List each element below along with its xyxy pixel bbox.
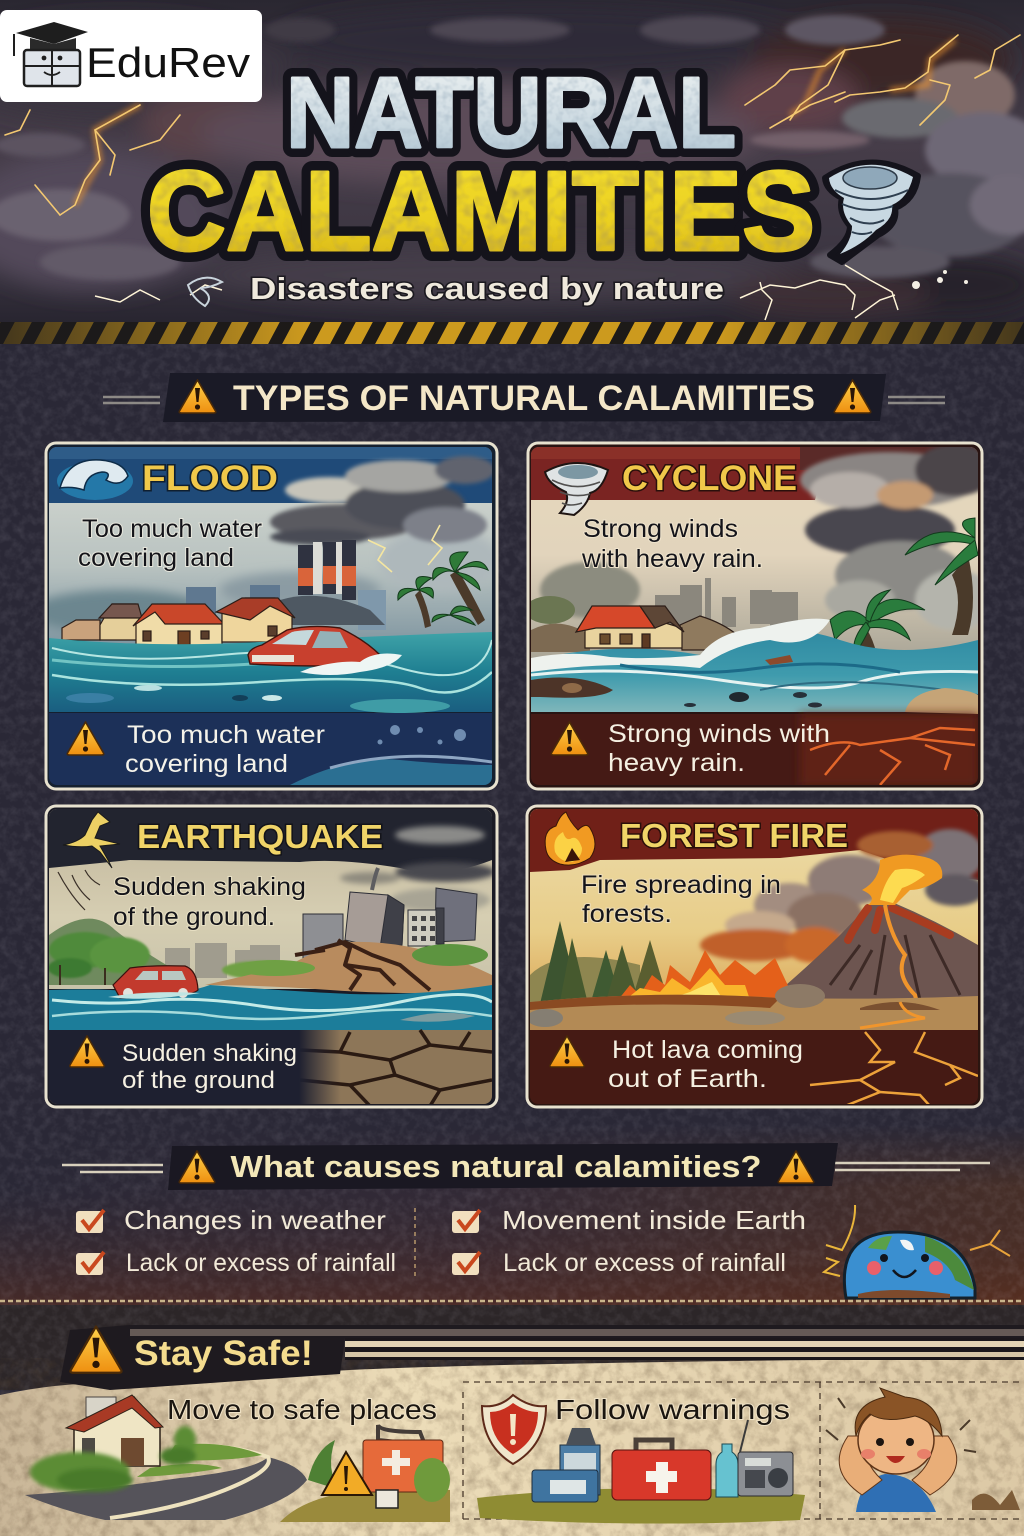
volcano smoke bbox=[700, 829, 985, 963]
check item: Changes in weather bbox=[124, 1205, 386, 1235]
left trees and rocks bbox=[525, 596, 590, 652]
cyclone title: CYCLONE bbox=[622, 459, 797, 498]
icon: flame bbox=[545, 812, 595, 865]
red car bbox=[248, 626, 402, 675]
flood sky caption bbox=[78, 515, 262, 572]
floodwater bbox=[49, 632, 492, 713]
fire sky caption: forests. bbox=[582, 900, 672, 928]
earthquake sky and header bbox=[49, 809, 495, 989]
subtitle: Disasters caused by nature bbox=[250, 271, 724, 306]
cyclone sky caption: Strong winds bbox=[583, 515, 738, 543]
forest fire sky and header bbox=[530, 809, 978, 1014]
palm trees bbox=[398, 552, 488, 628]
fire caption text: out of Earth. bbox=[608, 1065, 767, 1093]
distant buildings bbox=[186, 585, 386, 630]
cyclone storm clouds bbox=[540, 444, 995, 630]
flood title: FLOOD bbox=[142, 459, 278, 498]
panel: flood bbox=[30, 443, 500, 789]
water surge bbox=[531, 619, 978, 714]
safety item: follow warnings: Follow warnings bbox=[555, 1394, 790, 1425]
earthquake caption band bbox=[49, 1030, 492, 1106]
checklist: causes bbox=[76, 1205, 806, 1277]
section heading: types bbox=[103, 373, 945, 422]
icon: wave bbox=[57, 460, 133, 500]
check item: Lack or excess of rainfall bbox=[503, 1249, 786, 1277]
safety item: move to safe places bbox=[25, 1394, 450, 1522]
fire sky caption bbox=[581, 871, 781, 928]
city skyline bbox=[655, 578, 798, 628]
flood sky and header bbox=[30, 447, 500, 647]
cyclone caption text: Strong winds with bbox=[608, 720, 830, 748]
ground strip bbox=[477, 1488, 805, 1524]
flood caption band: covering land bbox=[125, 750, 288, 778]
heading: stay safe: Stay Safe! bbox=[134, 1334, 313, 1373]
icon: small storm swirl bbox=[188, 278, 222, 306]
panel: forest fire bbox=[527, 806, 985, 1107]
icon: smiling earth bbox=[824, 1205, 1010, 1298]
cyclone sky caption bbox=[581, 515, 763, 573]
fire caption band bbox=[530, 1030, 978, 1106]
houses bbox=[62, 598, 295, 648]
red car bbox=[108, 966, 200, 999]
title: NATURAL bbox=[286, 57, 736, 169]
flood sky caption: covering land bbox=[78, 544, 234, 572]
buildings bbox=[303, 888, 477, 959]
floodwater bbox=[49, 985, 492, 1030]
cyclone caption band bbox=[531, 714, 978, 786]
section heading: causes: What causes natural calamities? bbox=[230, 1149, 762, 1184]
cyclone sky caption: with heavy rain. bbox=[581, 545, 763, 573]
section heading: types: TYPES OF NATURAL CALAMITIES bbox=[233, 379, 815, 418]
icon: graduation cap mascot bbox=[14, 22, 88, 86]
forest flames bbox=[618, 950, 790, 1000]
flood lightning bbox=[368, 525, 442, 572]
icon: ground crack bbox=[63, 812, 120, 868]
check item: Lack or excess of rainfall bbox=[126, 1249, 396, 1277]
dashed divider bbox=[0, 1300, 1024, 1302]
title: CALAMITIES bbox=[147, 148, 815, 274]
flood caption band bbox=[49, 713, 492, 786]
earthquake sky caption: Sudden shaking bbox=[113, 873, 306, 901]
ground bbox=[527, 984, 978, 1032]
section heading: causes bbox=[62, 1143, 990, 1190]
fire caption text bbox=[608, 1036, 803, 1093]
fire caption text: Hot lava coming bbox=[612, 1036, 803, 1064]
earthquake caption text bbox=[122, 1040, 297, 1094]
heading: stay safe bbox=[60, 1325, 1024, 1390]
flood caption band: Too much water bbox=[127, 721, 325, 749]
panel: cyclone bbox=[525, 443, 995, 789]
factory chimneys bbox=[298, 540, 356, 600]
hill and trees left bbox=[48, 919, 298, 985]
illustration: child covering ears bbox=[826, 1388, 1020, 1512]
illustration: house and road bbox=[25, 1395, 307, 1520]
flood smoke cloud bbox=[270, 456, 495, 545]
cyclone sky and header bbox=[531, 447, 978, 662]
lightning glow bbox=[75, 40, 955, 205]
icon: tornado bbox=[545, 463, 608, 515]
distant city bbox=[165, 943, 280, 978]
pine trees bbox=[530, 921, 668, 1012]
cyclone caption text bbox=[608, 720, 830, 777]
storm sky header bbox=[0, 0, 1024, 322]
earthquake caption text: of the ground bbox=[122, 1067, 275, 1094]
cyclone caption text: heavy rain. bbox=[608, 749, 745, 777]
smoke trail bbox=[372, 868, 378, 890]
title: NATURAL bbox=[286, 57, 736, 169]
earthquake sky caption bbox=[113, 873, 306, 931]
icon: warning shield bbox=[482, 1395, 546, 1464]
flood sky caption: Too much water bbox=[82, 515, 262, 543]
panel: stay safe paper bbox=[0, 1358, 1024, 1536]
hazard tape divider bbox=[0, 322, 1024, 344]
safety item: move to safe places: Move to safe places bbox=[167, 1394, 437, 1425]
earthquake title: EARTHQUAKE bbox=[137, 818, 383, 855]
supplies bbox=[532, 1420, 793, 1502]
title: CALAMITIES bbox=[147, 148, 815, 274]
fire sky caption: Fire spreading in bbox=[581, 871, 781, 899]
earthquake caption text: Sudden shaking bbox=[122, 1040, 297, 1067]
fire title: FOREST FIRE bbox=[620, 817, 848, 854]
logo wordmark: EduRev bbox=[86, 39, 250, 86]
title bbox=[147, 57, 815, 274]
panel: earthquake bbox=[46, 806, 497, 1107]
check item: Movement inside Earth bbox=[502, 1205, 806, 1235]
safety item: follow warnings bbox=[477, 1394, 805, 1524]
house bbox=[576, 606, 748, 650]
earthquake sky caption: of the ground. bbox=[113, 903, 275, 931]
volcano eruption bbox=[862, 855, 942, 905]
logo: EduRev bbox=[0, 10, 262, 102]
icon: tornado bbox=[825, 162, 918, 262]
illustration: warning sign and kit bbox=[280, 1425, 450, 1522]
volcano bbox=[778, 902, 978, 1015]
palm trees bbox=[830, 518, 978, 662]
cracked land mound bbox=[205, 940, 492, 993]
